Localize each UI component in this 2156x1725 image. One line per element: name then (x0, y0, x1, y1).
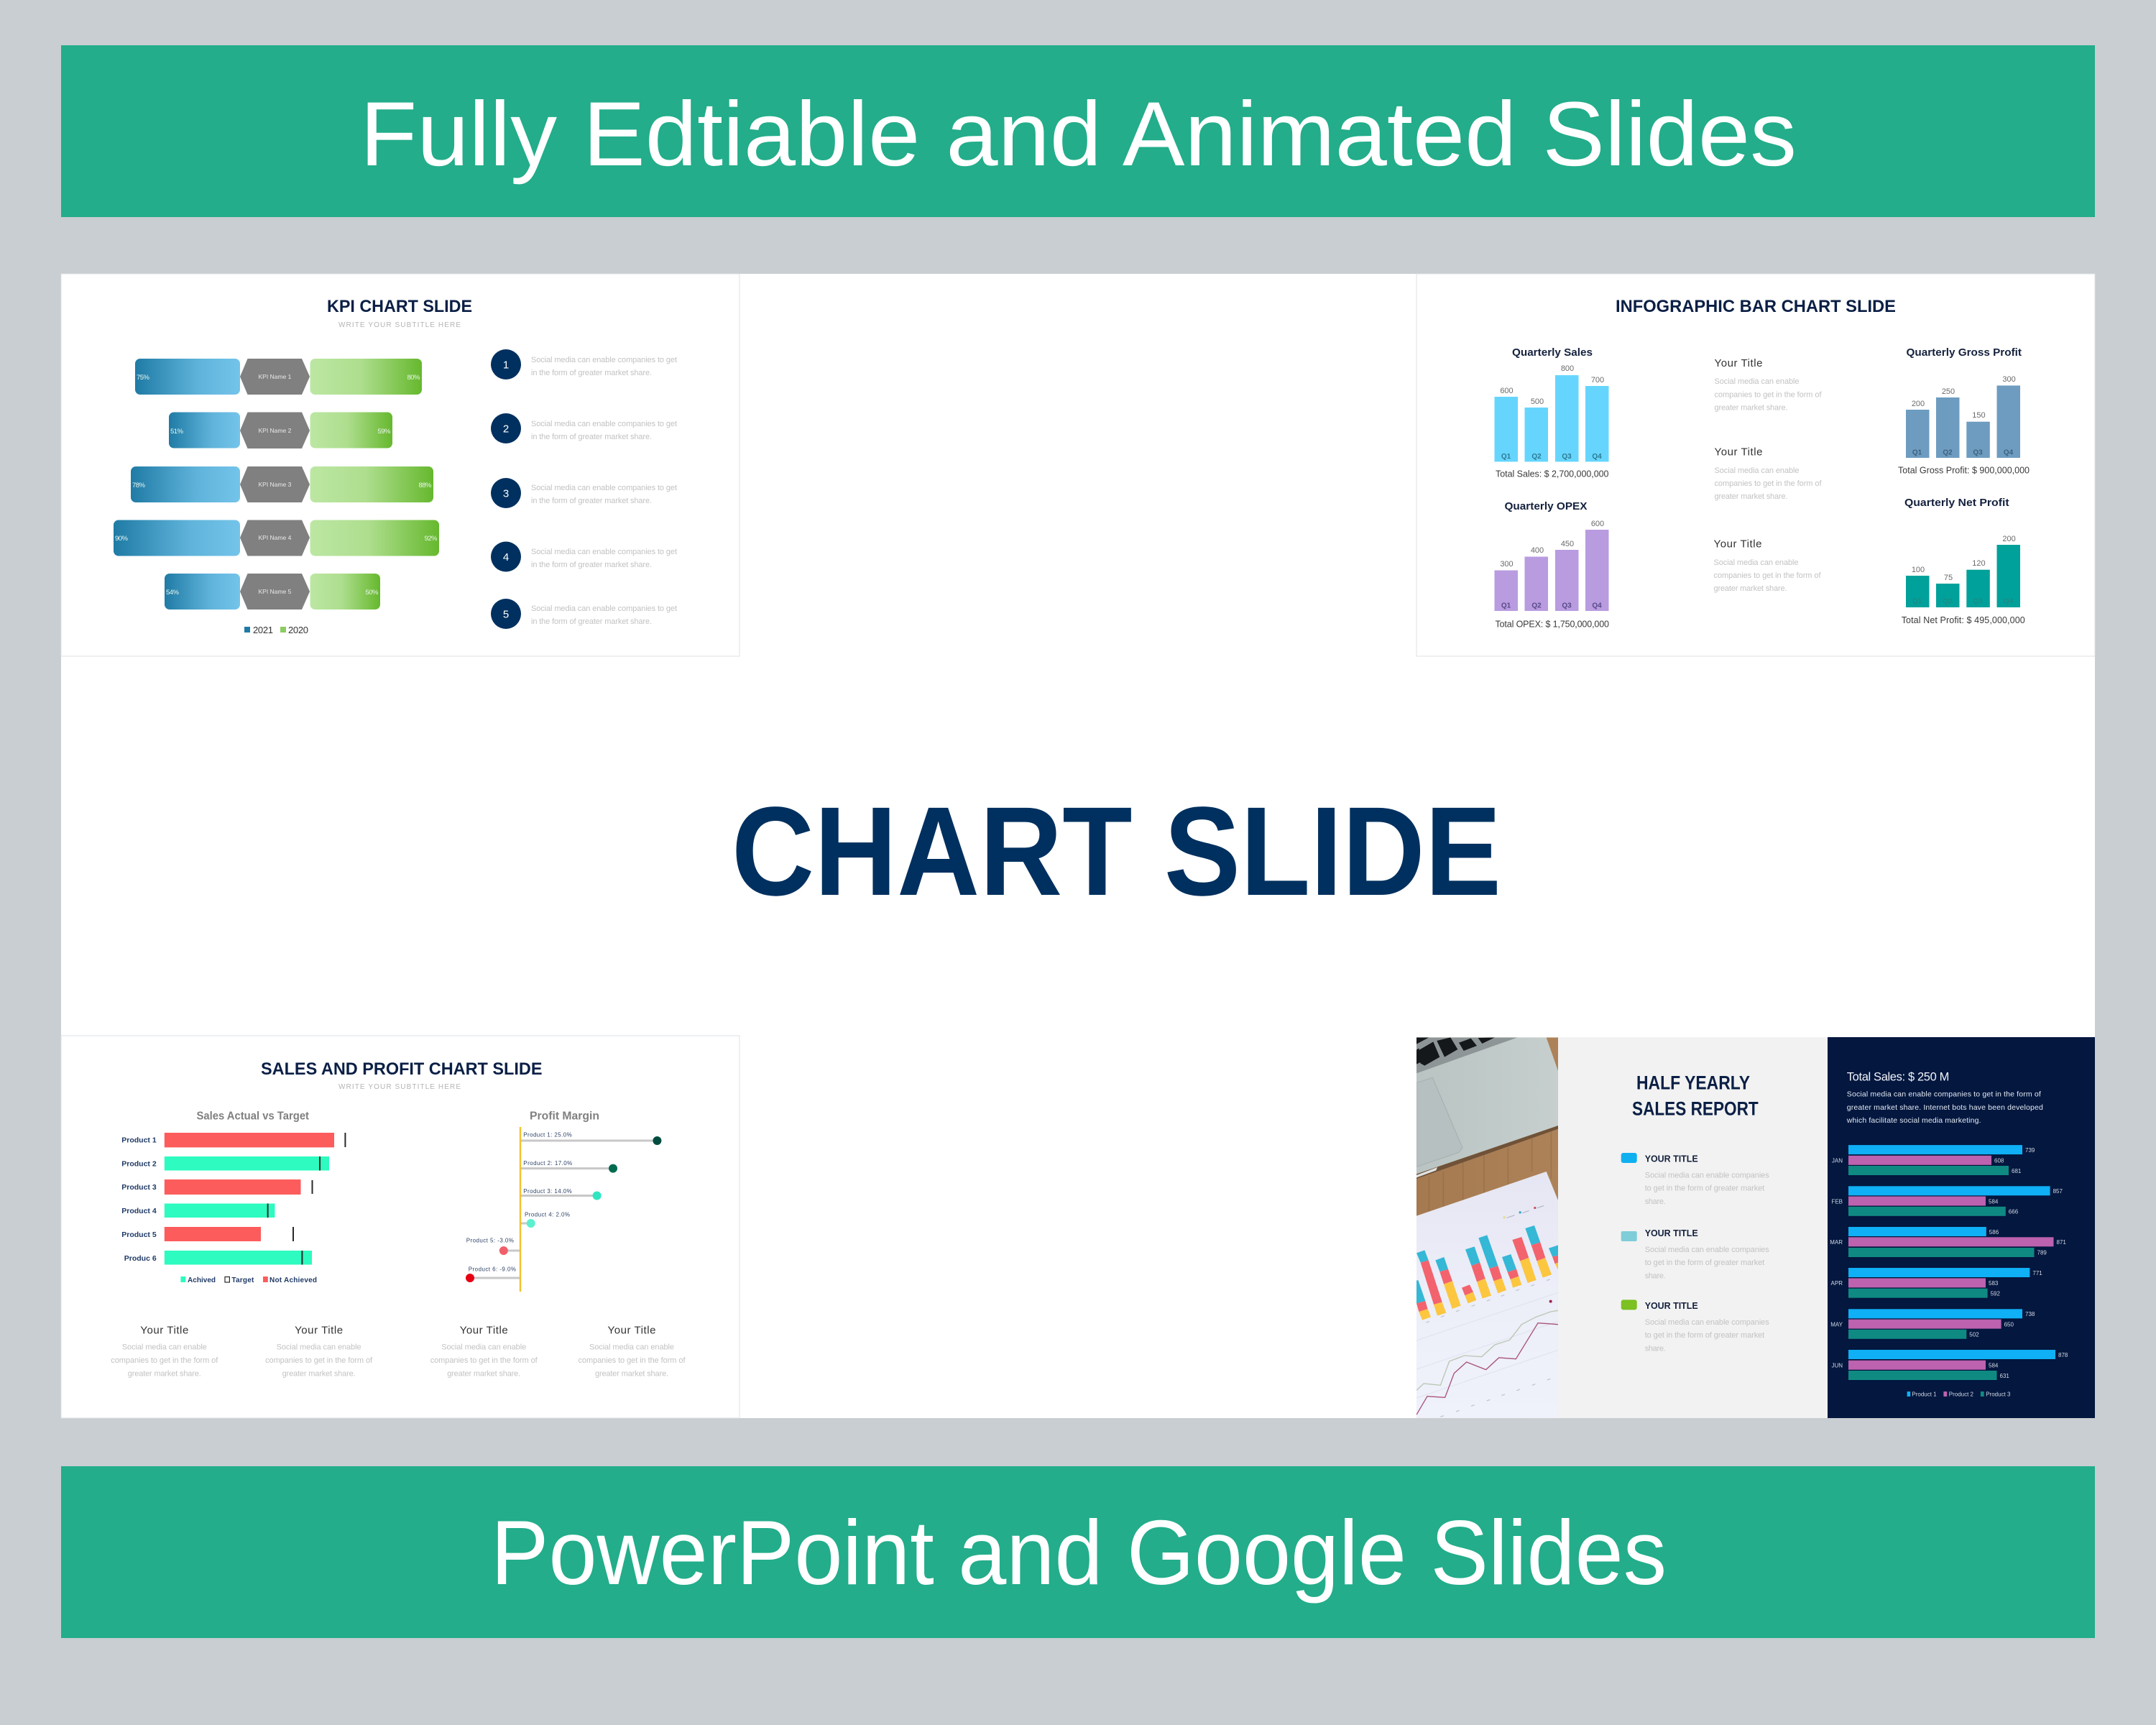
chart: profit margin: Product 4: 2.0% (525, 1211, 570, 1218)
January bars: 681 (2012, 1168, 2022, 1174)
May bars (1830, 1309, 2035, 1339)
panel: infographic bar chart slide (1416, 274, 2095, 656)
chart: quarterly OPEX: Q3 (1562, 602, 1572, 610)
chart: sales actual vs target: Product 2 (121, 1159, 157, 1168)
text block: your title 1: greater market share. (1715, 404, 1788, 413)
May bars: 650 (2004, 1321, 2014, 1328)
report item 1 (1621, 1153, 1769, 1206)
chart: quarterly sales: 600 (1500, 387, 1514, 395)
chart: quarterly net profit: 100 (1912, 566, 1925, 574)
chart: quarterly net profit: 120 (1972, 559, 1986, 568)
text block: column 2: Your Title (295, 1324, 343, 1337)
June bars: JUN (1831, 1363, 1843, 1368)
text block: column 2 (265, 1324, 373, 1378)
text block: your title 3: greater market share. (1713, 584, 1787, 593)
chart: quarterly sales: Q4 (1592, 453, 1602, 461)
KPI note 3: Social media can enable companies to get (531, 484, 677, 492)
KPI row 4 (114, 520, 439, 556)
KPI legend (244, 625, 308, 635)
bar chart title: INFOGRAPHIC BAR CHART SLIDE (1616, 297, 1896, 316)
chart: quarterly OPEX (1495, 500, 1609, 630)
chart: quarterly net profit: Q3 (1973, 598, 1983, 605)
KPI note 3 (491, 478, 677, 508)
panel: half yearly sales report (1416, 1037, 2095, 1418)
text block: your title 1: companies to get in the form of (1715, 390, 1822, 399)
chart: quarterly OPEX: Q2 (1531, 602, 1542, 610)
chart: quarterly net profit (1902, 497, 2025, 625)
June bars: 878 (2058, 1352, 2068, 1358)
text block: your title 3 (1713, 538, 1821, 593)
dark panel description: which facilitate social media marketing. (1846, 1116, 1981, 1125)
report item 3: to get in the form of greater market (1645, 1331, 1764, 1340)
KPI note 4: 4 (503, 551, 509, 564)
February bars: FEB (1831, 1199, 1843, 1205)
February bars: 857 (2053, 1188, 2063, 1195)
monthly chart legend (1907, 1392, 2011, 1397)
report item 2: Social media can enable companies (1645, 1246, 1769, 1254)
chart: quarterly net profit: Q4 (2004, 598, 2014, 605)
central white panel (61, 274, 2095, 1418)
KPI note 4: Social media can enable companies to get (531, 548, 677, 556)
text block: your title 1: Your Title (1715, 357, 1762, 369)
KPI row 2: 59% (378, 428, 391, 436)
chart: quarterly OPEX: 600 (1591, 520, 1604, 528)
chart: quarterly net profit: 200 (2002, 535, 2016, 543)
April bars: 771 (2032, 1270, 2042, 1276)
KPI row 5: 50% (365, 589, 379, 597)
panel: sales and profit chart slide (61, 1036, 740, 1418)
March bars (1830, 1227, 2066, 1257)
KPI note 5: Social media can enable companies to get (531, 604, 677, 613)
chart: quarterly sales: Total Sales: $ 2,700,000,000 (1496, 469, 1609, 479)
May bars: MAY (1830, 1321, 1843, 1328)
February bars (1831, 1186, 2063, 1216)
report item 3: YOUR TITLE (1645, 1300, 1698, 1311)
March bars: MAR (1830, 1239, 1843, 1246)
report item 3 (1621, 1300, 1769, 1353)
chart: profit margin: Product 5: -3.0% (466, 1238, 514, 1243)
text block: column 4: companies to get in the form of (578, 1356, 686, 1365)
chart: quarterly gross profit (1898, 346, 2030, 476)
report item 3: share. (1645, 1344, 1666, 1353)
January bars: 739 (2025, 1147, 2035, 1154)
May bars: 502 (1969, 1331, 1979, 1338)
chart: quarterly gross profit: Q1 (1912, 448, 1922, 456)
KPI row 1: 75% (137, 374, 150, 382)
photo: laptop and printed charts (1416, 1037, 1558, 1418)
chart: profit margin (466, 1110, 661, 1292)
panel: KPI chart slide (61, 274, 740, 656)
chart: sales actual vs target: Product 3 (121, 1183, 157, 1192)
report item 2: share. (1645, 1271, 1666, 1280)
May bars: 738 (2025, 1311, 2035, 1317)
KPI title: KPI CHART SLIDE (327, 297, 472, 316)
chart: quarterly sales: 800 (1561, 364, 1574, 373)
text block: column 1 (111, 1324, 218, 1378)
KPI row 5: KPI Name 5 (258, 588, 292, 595)
text block: column 4 (578, 1324, 686, 1378)
text block: your title 1: Social media can enable (1715, 377, 1800, 386)
chart: quarterly OPEX: Total OPEX: $ 1,750,000,000 (1495, 620, 1609, 630)
chart: quarterly sales: Q2 (1531, 453, 1542, 461)
KPI note 2: in the form of greater market share. (531, 433, 652, 441)
bottom banner: PowerPoint and Google Slides (491, 1501, 1667, 1604)
text block: column 3: Your Title (460, 1324, 508, 1337)
chart: quarterly sales: 700 (1591, 376, 1604, 385)
April bars: APR (1831, 1280, 1843, 1287)
text block: column 4: greater market share. (595, 1369, 668, 1378)
text block: your title 2: Your Title (1715, 446, 1762, 459)
chart: sales actual vs target: Product 5 (121, 1230, 157, 1239)
text block: column 2: greater market share. (282, 1369, 356, 1378)
chart: quarterly gross profit: 300 (2002, 375, 2016, 384)
text block: your title 1 (1715, 357, 1822, 413)
chart: profit margin: Product 6: -9.0% (469, 1266, 516, 1272)
chart: quarterly OPEX: 400 (1531, 546, 1544, 555)
text block: column 1: Your Title (140, 1324, 188, 1337)
report item 2 (1621, 1228, 1769, 1280)
chart: quarterly sales: Q3 (1562, 453, 1572, 461)
chart: sales actual vs target: Sales Actual vs Target (197, 1110, 310, 1123)
text block: your title 2: companies to get in the form of (1715, 479, 1822, 488)
January bars: JAN (1832, 1157, 1843, 1164)
chart: quarterly gross profit: Q3 (1973, 448, 1983, 456)
chart: sales actual vs target: Product 1 (121, 1136, 157, 1145)
KPI row 5: 54% (166, 589, 180, 597)
February bars: 584 (1989, 1199, 1999, 1205)
monthly chart legend: Product 3 (1986, 1392, 2011, 1397)
chart: quarterly gross profit: Q2 (1943, 448, 1953, 456)
June bars: 584 (1989, 1363, 1999, 1368)
KPI row 4: 90% (115, 535, 129, 543)
January bars (1832, 1145, 2035, 1175)
text block: your title 2: greater market share. (1715, 492, 1788, 501)
chart: quarterly net profit: Q2 (1943, 598, 1953, 605)
chart: quarterly sales: Q1 (1501, 453, 1511, 461)
KPI note 1: in the form of greater market share. (531, 369, 652, 377)
KPI note 1 (491, 349, 677, 380)
chart: quarterly OPEX: Quarterly OPEX (1505, 500, 1587, 512)
chart: quarterly net profit: 75 (1944, 574, 1953, 582)
KPI note 4 (491, 542, 677, 572)
chart: quarterly OPEX: 450 (1561, 540, 1574, 548)
KPI row 2: 51% (170, 428, 184, 436)
text block: column 3: greater market share. (447, 1369, 520, 1378)
text block: column 1: greater market share. (128, 1369, 201, 1378)
KPI legend: 2021 (253, 625, 273, 635)
KPI note 4: in the form of greater market share. (531, 561, 652, 569)
chart: quarterly gross profit: Quarterly Gross Profit (1906, 346, 2022, 359)
chart: quarterly gross profit: Q4 (2004, 448, 2014, 456)
chart: quarterly gross profit: 150 (1972, 411, 1986, 420)
KPI row 4: KPI Name 4 (258, 534, 292, 541)
chart: quarterly sales: Quarterly Sales (1512, 346, 1593, 359)
June bars (1831, 1350, 2068, 1380)
sales legend (180, 1276, 317, 1284)
KPI row 5 (165, 574, 380, 610)
chart: quarterly net profit: Total Net Profit: $ 495,000,000 (1902, 615, 2025, 625)
report item 1: Social media can enable companies (1645, 1172, 1769, 1180)
report heading: HALF YEARLY (1636, 1072, 1750, 1094)
KPI row 3: 88% (418, 482, 432, 489)
sales title: SALES AND PROFIT CHART SLIDE (261, 1059, 542, 1079)
text block: column 2: Social media can enable (277, 1343, 361, 1352)
chart: quarterly gross profit: 200 (1912, 400, 1925, 408)
dark chart panel (1828, 1037, 2095, 1418)
report heading (1632, 1072, 1759, 1119)
text block: column 4: Social media can enable (589, 1343, 674, 1352)
KPI note 2 (491, 413, 677, 443)
report heading: SALES REPORT (1632, 1098, 1759, 1119)
text block: column 3: Social media can enable (441, 1343, 526, 1352)
monthly chart legend: Product 2 (1949, 1392, 1974, 1397)
report item 2: to get in the form of greater market (1645, 1259, 1764, 1267)
chart: quarterly sales: 500 (1531, 397, 1544, 406)
text block: your title 3: companies to get in the form of (1713, 571, 1821, 580)
text block: column 3 (430, 1324, 538, 1378)
KPI row 1: 80% (407, 374, 420, 382)
sales subtitle: WRITE YOUR SUBTITLE HERE (338, 1083, 461, 1091)
bottom banner (61, 1466, 2095, 1638)
June bars: 631 (1999, 1373, 2009, 1379)
chart: sales actual vs target (121, 1110, 345, 1284)
middle column background (1558, 1037, 1828, 1418)
sales legend: Not Achieved (270, 1276, 317, 1284)
April bars: 583 (1989, 1280, 1999, 1287)
text block: your title 2 (1715, 446, 1822, 501)
chart: sales actual vs target: Produc 6 (124, 1254, 157, 1263)
KPI legend: 2020 (288, 625, 308, 635)
text block: column 1: companies to get in the form of (111, 1356, 218, 1365)
KPI row 2: KPI Name 2 (258, 427, 292, 434)
chart: quarterly OPEX: Q4 (1592, 602, 1602, 610)
chart: profit margin: Profit Margin (530, 1110, 599, 1123)
March bars: 789 (2037, 1249, 2047, 1256)
text block: column 1: Social media can enable (122, 1343, 207, 1352)
top banner (61, 45, 2095, 217)
April bars (1831, 1268, 2042, 1298)
chart: quarterly net profit: Q1 (1912, 598, 1922, 605)
main heading: CHART SLIDE (732, 781, 1501, 922)
monthly chart legend: Product 1 (1912, 1392, 1937, 1397)
text block: your title 3: Social media can enable (1713, 558, 1798, 567)
March bars: 586 (1989, 1229, 1999, 1236)
KPI note 5: 5 (503, 608, 509, 621)
KPI note 1: Social media can enable companies to get (531, 356, 677, 364)
text block: your title 2: Social media can enable (1715, 466, 1800, 475)
KPI note 1: 1 (503, 359, 509, 371)
February bars: 666 (2009, 1209, 2019, 1215)
chart: quarterly gross profit: Total Gross Profit: $ 900,000,000 (1898, 466, 2030, 476)
total sales heading: Total Sales: $ 250 M (1847, 1071, 1949, 1084)
March bars: 871 (2057, 1239, 2066, 1246)
report item 1: share. (1645, 1197, 1666, 1206)
KPI row 1: KPI Name 1 (258, 373, 292, 380)
chart: profit margin: Product 2: 17.0% (523, 1160, 572, 1167)
KPI note 3: 3 (503, 487, 509, 500)
chart: profit margin: Product 3: 14.0% (523, 1188, 572, 1195)
report item 1: to get in the form of greater market (1645, 1184, 1764, 1193)
chart: sales actual vs target: Product 4 (121, 1207, 157, 1215)
KPI row 4: 92% (424, 535, 438, 543)
dark panel description (1846, 1090, 2043, 1125)
report item 2: YOUR TITLE (1645, 1228, 1698, 1238)
April bars: 592 (1991, 1291, 2000, 1297)
KPI row 3: KPI Name 3 (258, 481, 292, 488)
report item 3: Social media can enable companies (1645, 1318, 1769, 1327)
chart: quarterly net profit: Quarterly Net Profit (1904, 497, 2009, 509)
text block: column 2: companies to get in the form of (265, 1356, 373, 1365)
KPI subtitle: WRITE YOUR SUBTITLE HERE (338, 321, 461, 329)
KPI row 3: 78% (132, 482, 146, 489)
KPI note 5 (491, 599, 677, 629)
text block: your title 3: Your Title (1713, 538, 1762, 551)
chart: profit margin: Product 1: 25.0% (523, 1132, 572, 1138)
chart: monthly product bars (1830, 1145, 2068, 1397)
dark panel description: Social media can enable companies to get in the form of (1847, 1090, 2041, 1099)
chart: quarterly OPEX: 300 (1500, 560, 1514, 569)
text block: column 4: Your Title (608, 1324, 655, 1337)
text block: column 3: companies to get in the form of (430, 1356, 538, 1365)
KPI row 2 (169, 413, 392, 448)
chart: quarterly gross profit: 250 (1942, 387, 1955, 396)
chart: quarterly OPEX: Q1 (1501, 602, 1511, 610)
January bars: 608 (1994, 1157, 2004, 1164)
KPI row 3 (131, 466, 433, 502)
top banner: Fully Edtiable and Animated Slides (360, 83, 1797, 185)
chart: quarterly sales (1495, 346, 1609, 479)
KPI note 2: Social media can enable companies to get (531, 420, 677, 428)
KPI note 5: in the form of greater market share. (531, 617, 652, 626)
KPI note 3: in the form of greater market share. (531, 497, 652, 505)
sales legend: Target (231, 1276, 254, 1284)
dark panel description: greater market share. Internet bots have been developed (1847, 1103, 2043, 1112)
sales legend: Achived (188, 1276, 216, 1284)
KPI row 1 (135, 359, 422, 395)
KPI note 2: 2 (503, 423, 509, 436)
report item 1: YOUR TITLE (1645, 1154, 1698, 1164)
